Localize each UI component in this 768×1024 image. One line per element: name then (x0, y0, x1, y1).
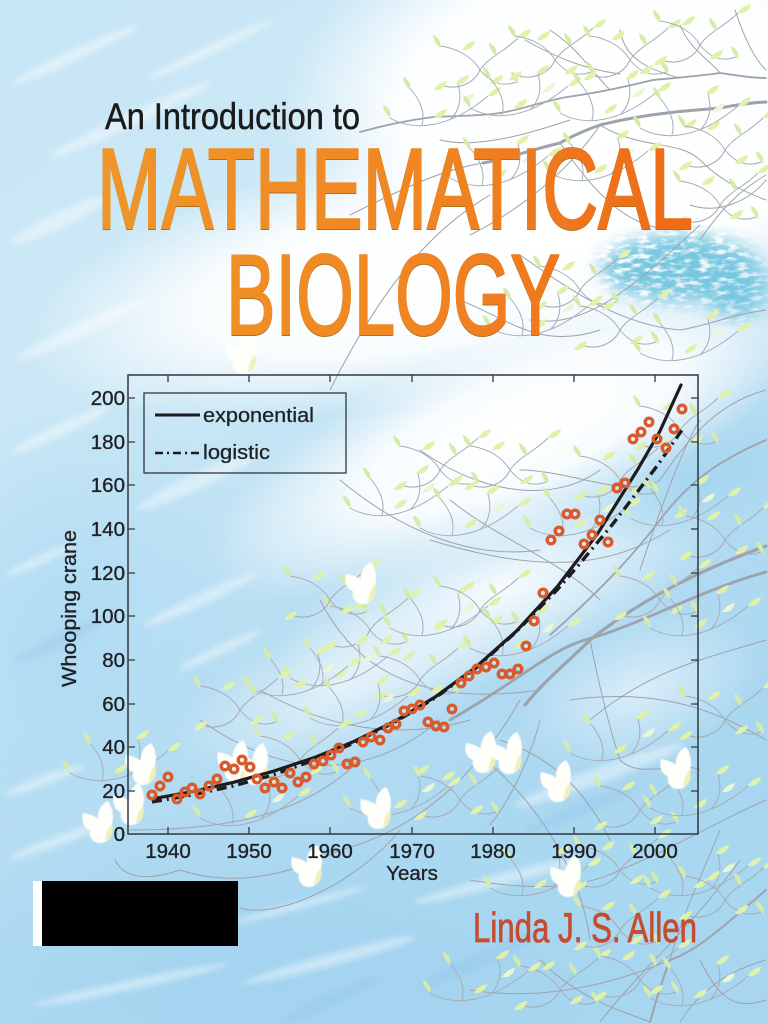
y axis labels: 140 (91, 518, 125, 541)
blue foliage (600, 234, 768, 318)
y axis labels: 80 (102, 649, 125, 672)
author: Linda J. S. Allen (473, 904, 697, 951)
y axis labels (91, 387, 125, 846)
y axis labels: 0 (114, 823, 125, 846)
exponential curve (152, 385, 681, 799)
x axis labels: 2000 (632, 840, 678, 863)
legend: exponential (203, 405, 314, 427)
x axis labels (145, 840, 678, 863)
logistic curve (152, 430, 682, 802)
x axis labels: 1980 (470, 840, 516, 863)
title: Biology: BIOLOGY (226, 232, 560, 359)
x axis labels: 1950 (226, 840, 272, 863)
legend: logistic (203, 442, 270, 464)
x axis title: Years (386, 862, 438, 885)
y axis labels: 180 (91, 431, 125, 454)
y axis title: Whooping crane (58, 530, 81, 687)
y axis labels: 200 (91, 387, 125, 410)
data points (148, 405, 686, 803)
chart frame (128, 375, 698, 834)
y axis labels: 60 (102, 693, 125, 716)
legend (144, 393, 346, 473)
title: An Introduction to: An Introduction to (105, 96, 360, 137)
x axis labels: 1990 (551, 840, 597, 863)
x axis labels: 1960 (307, 840, 353, 863)
line chart: whooping crane population (58, 375, 698, 885)
redaction bar (33, 881, 238, 946)
x axis labels: 1940 (145, 840, 191, 863)
y axis labels: 40 (102, 736, 125, 759)
y axis labels: 120 (91, 562, 125, 585)
y axis labels: 20 (102, 780, 125, 803)
y axis labels: 100 (91, 605, 125, 628)
y axis labels: 160 (91, 474, 125, 497)
x axis labels: 1970 (389, 840, 435, 863)
